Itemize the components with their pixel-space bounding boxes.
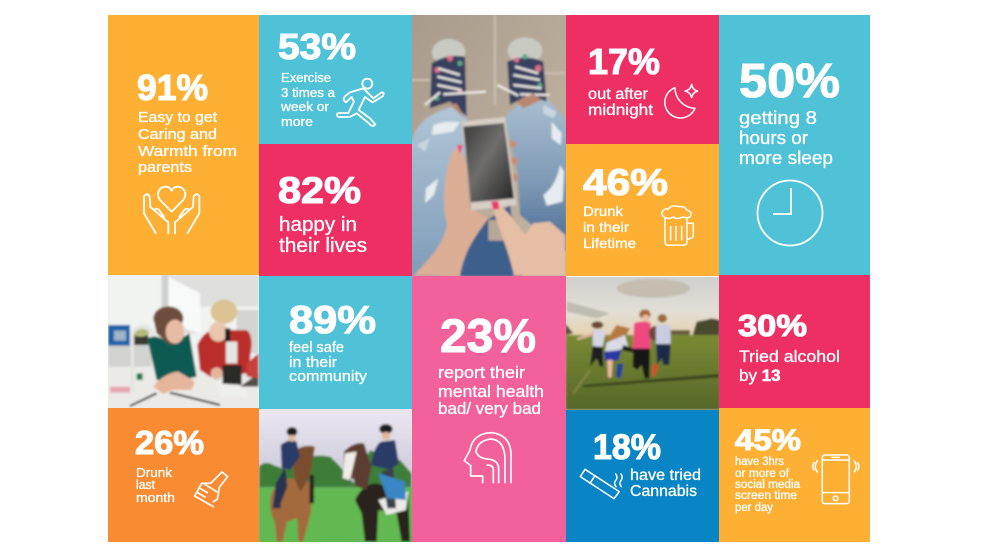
player pink — [639, 309, 651, 319]
icon: heart in hands — [144, 187, 199, 233]
label: out after midnight — [588, 86, 654, 119]
photo: girl's legs, shoes and smartphone — [410, 13, 567, 278]
label: have tried cannabis: have tried — [630, 467, 701, 484]
shoes — [432, 39, 465, 66]
phone — [462, 117, 517, 210]
label: caring and warmth: parents — [138, 159, 192, 176]
label: caring and warmth: Caring and — [138, 126, 217, 143]
stat: 45%: 45% — [735, 424, 801, 457]
label: getting 8 hours or more sleep — [739, 107, 833, 168]
panel: 23% mental health — [412, 276, 566, 542]
label: caring and warmth — [138, 109, 237, 176]
panel: 46% drunk in lifetime — [566, 144, 719, 276]
label: have tried cannabis — [630, 467, 701, 500]
label: report their mental health bad / very bad: mental health — [438, 383, 544, 401]
icon: cigarette — [580, 469, 622, 499]
label: 3hrs or more social media: social media — [735, 479, 801, 491]
player right — [658, 314, 667, 323]
label: getting 8 hours or more sleep: hours or — [739, 127, 808, 148]
icon: hand holding bottle — [195, 472, 228, 507]
label: 3hrs or more social media: screen time — [735, 490, 797, 502]
label: feel safe in their community: community — [289, 369, 368, 385]
label: feel safe in their community: feel safe — [289, 340, 344, 356]
label: getting 8 hours or more sleep: getting 8 — [739, 107, 817, 128]
icon: vibrating smartphone — [813, 455, 859, 504]
stat: 30%: 30% — [738, 308, 807, 343]
stat: 91%: 91% — [137, 67, 208, 108]
pointing hand — [492, 203, 565, 276]
panel: 91% caring and warmth from parents — [108, 15, 259, 275]
stat: 46%: 46% — [583, 162, 668, 203]
photo: two girls with a microscope — [108, 275, 259, 408]
label: tried alcohol by 13: by 13 — [739, 366, 781, 385]
panel: 30% tried alcohol by 13 — [719, 275, 870, 408]
label: drunk last month — [136, 465, 175, 505]
label: getting 8 hours or more sleep: more sleep — [739, 147, 833, 168]
label: out after midnight: midnight — [588, 102, 654, 119]
dark horse and rider — [355, 483, 410, 542]
label: drunk last month: month — [136, 490, 175, 505]
label: report their mental health bad / very bad: report their — [438, 364, 526, 382]
stat: 23%: 23% — [440, 309, 536, 362]
label: 3hrs or more social media: or more of — [735, 468, 790, 480]
icon: moon and star — [665, 84, 698, 118]
microscope — [225, 328, 230, 342]
label: 3hrs or more social media: per day — [735, 502, 773, 514]
stat: 26%: 26% — [135, 424, 204, 461]
panel: 18% tried cannabis — [566, 410, 719, 542]
label: caring and warmth: Easy to get — [138, 109, 218, 126]
label: happy in their lives — [279, 213, 367, 257]
panel: 89% feel safe — [259, 276, 412, 409]
panel: 82% happy — [259, 144, 412, 276]
label: out after midnight: out after — [588, 86, 649, 103]
stat: 17%: 17% — [588, 41, 660, 82]
icon: runner — [337, 79, 384, 126]
panel: 45% social media screen time — [719, 408, 870, 542]
label: exercise 3 times a week: week or — [280, 100, 329, 114]
icon: head with brain — [464, 433, 511, 483]
label: happy in their lives: their lives — [279, 234, 367, 257]
label: drunk in their lifetime: in their — [583, 219, 629, 235]
label: feel safe in their community — [289, 340, 368, 385]
player white/blue — [607, 325, 630, 342]
label: tried alcohol by 13: Tried alcohol — [739, 347, 840, 366]
panel: 26% drunk last month — [108, 408, 259, 542]
label: feel safe in their community: in their — [289, 355, 337, 371]
photo: two girls riding horses — [258, 408, 413, 544]
label: drunk in their lifetime — [583, 203, 636, 251]
brown horse and rider — [270, 478, 313, 542]
label: drunk in their lifetime: Drunk — [583, 203, 624, 219]
label: 3hrs or more social media — [735, 456, 801, 514]
girl in red — [197, 330, 252, 377]
label: caring and warmth: Warmth from — [138, 143, 237, 160]
panel: 53% exercise — [259, 15, 412, 144]
label: drunk last month: last — [136, 477, 155, 492]
panel: 17% out after midnight — [566, 15, 719, 144]
label: tried alcohol by 13 — [739, 347, 840, 385]
left hand — [413, 145, 488, 276]
label: have tried cannabis: Cannabis — [630, 483, 697, 500]
panel: 50% getting 8 hours sleep — [719, 15, 870, 275]
label: drunk in their lifetime: Lifetime — [583, 235, 636, 251]
label: exercise 3 times a week: 3 times a — [281, 86, 335, 100]
stat: 18%: 18% — [593, 428, 661, 467]
stat: 82%: 82% — [278, 170, 361, 211]
label: exercise 3 times a week: Exercise — [281, 71, 331, 85]
stat: 50%: 50% — [739, 55, 840, 108]
label: report their mental health bad / very bad: bad/ very bad — [438, 400, 541, 418]
label: happy in their lives: happy in — [279, 213, 357, 236]
label: exercise 3 times a week: more — [281, 115, 313, 129]
icon: beer mug — [662, 206, 693, 245]
label: exercise 3 times a week — [280, 71, 335, 129]
label: report their mental health bad / very bad — [438, 364, 544, 418]
stat: 89%: 89% — [289, 299, 376, 342]
girl in green — [147, 333, 197, 382]
player left — [591, 321, 603, 329]
stat: 53%: 53% — [278, 26, 356, 67]
photo: girls playing rugby on a field — [565, 275, 720, 410]
label: 3hrs or more social media: have 3hrs — [735, 456, 784, 468]
label: drunk last month: Drunk — [136, 465, 173, 480]
icon: clock — [758, 180, 822, 246]
